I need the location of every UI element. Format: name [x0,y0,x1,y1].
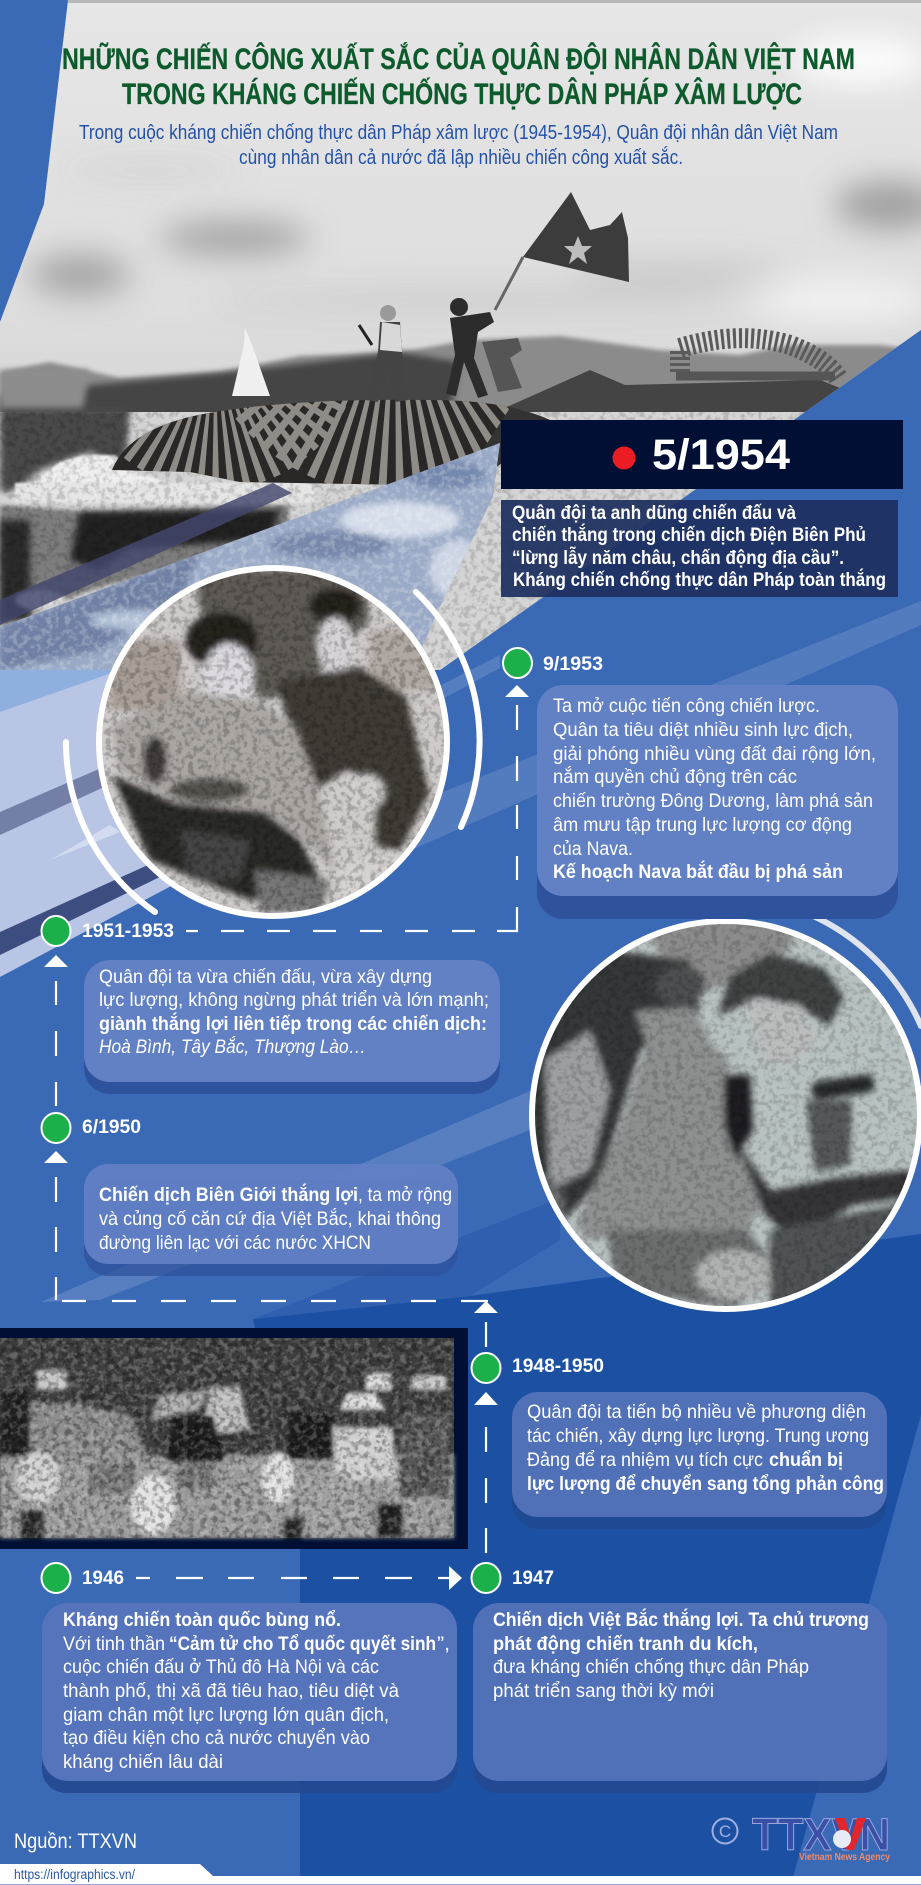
panel: 6/1950 card: và củng cố căn cứ địa Việt Bắc, khai thông [99,1207,441,1230]
white monument [232,328,270,396]
circular photo: leader with hat and binoculars [525,915,921,1320]
panel: 6/1950 card: , ta mở rộng [358,1184,452,1206]
milestone: 1951-1953 [42,916,174,946]
panel: 6/1950 card: Chiến dịch Biên Giới thắng lợi [99,1182,358,1206]
milestone: 6/1950: 6/1950 [82,1117,141,1138]
timeline dashed connectors [56,705,517,1578]
arcs around the circular photo [66,592,480,912]
mountains [0,334,900,420]
panel: 1948-1950 card: Quân đội ta tiến bộ nhiều về phương diện [527,1401,866,1423]
panel: 9/1953 card: giải phóng nhiều vùng đất đai rộng lớn, [553,743,876,765]
panel: 9/1953 card [537,685,898,919]
panel: 1951-1953 card: Hoà Bình, Tây Bắc, Thượng Lào… [99,1035,366,1058]
milestone: 1951-1953: 1951-1953 [82,921,174,942]
ground and rubble [0,404,805,670]
panel: 1946 card: Với tinh thần [63,1633,165,1655]
circular photo: two commanders at a map [95,562,455,922]
text block: 5/1954: Kháng chiến chống thực dân Pháp toàn thắng [513,569,886,591]
milestone: 1948-1950 [472,1353,604,1383]
milestone: 1948-1950: 1948-1950 [512,1356,604,1377]
panel: 1948-1950 card [512,1392,887,1529]
footer strip: https://infographics.vn/ [14,1867,135,1882]
panel: 1946 card: tạo điều kiện cho cả nước chuyển vào [63,1727,370,1749]
panel: 1947 card [473,1603,887,1793]
panel: 1946 card: “Cảm tử cho Tổ quốc quyết sinh [169,1633,436,1655]
logo: TTXVN: C [719,1822,731,1841]
footer strip [0,1864,921,1885]
panel: 1951-1953 card: Quân đội ta vừa chiến đấu, vừa xây dựng [99,966,432,988]
panel: 1946 card: thành phố, thị xã đã tiêu hao, tiêu diệt và [63,1680,399,1702]
panel: 1947 card: đưa kháng chiến chống thực dân Pháp [493,1656,809,1678]
panel: 1948-1950 card: tác chiến, xây dựng lực lượng. Trung ương [527,1425,869,1447]
panel: 1946 card: Kháng chiến toàn quốc bùng nổ. [63,1609,341,1631]
panel: 9/1953 card: nắm quyền chủ động trên các [553,765,797,788]
lattice structure [500,338,845,420]
title [62,42,855,111]
panel: 1951-1953 card [84,960,500,1094]
milestone: 9/1953 [503,648,603,678]
subtitle: cùng nhân dân cả nước đã lập nhiều chiến công xuất sắc. [239,146,683,169]
panel: 1946 card: ”, [437,1633,450,1655]
text block: 5/1954: “lừng lẫy năm châu, chấn động địa cầu”. [512,547,844,569]
panel: 9/1953 card: âm mưu tập trung lực lượng cơ động [553,814,852,836]
framed photo: crowd of soldiers and civilians [0,1328,468,1549]
text block: 5/1954: chiến thắng trong chiến dịch Điện Biên Phủ [512,524,866,546]
text block: 5/1954: Quân đội ta anh dũng chiến đấu và [512,503,796,524]
panel: 9/1953 card: Ta mở cuộc tiến công chiến lược. [553,695,820,717]
panel: 9/1953 card: của Nava. [553,838,633,860]
panel: 1946 card [42,1603,457,1793]
panel: 1946 card: cuộc chiến đấu ở Thủ đô Hà Nội và các [63,1656,379,1678]
panel: 1947 card: phát động chiến tranh du kích, [493,1633,758,1655]
logo: TTXVN: Vietnam News Agency [799,1852,890,1863]
panel: 1951-1953 card: giành thắng lợi liên tiếp trong các chiến dịch: [99,1011,487,1035]
dark diagonal bar on the photo [0,483,292,625]
panel: 6/1950 card [84,1164,458,1276]
text block: 5/1954 [501,500,898,597]
flag and pole [495,192,629,310]
date banner: 5/1954 [501,420,903,489]
bunker dome [112,400,550,485]
logo: TTXVN: TTXVN [752,1809,890,1860]
panel: 9/1953 card: Quân ta tiêu diệt nhiều sinh lực địch, [553,719,853,741]
panel: 1947 card: Chiến dịch Việt Bắc thắng lợi. Ta chủ trương [493,1607,869,1631]
arrowheads on the timeline [44,685,529,1590]
subtitle [79,121,838,169]
panel: 1946 card: giam chân một lực lượng lớn quân địch, [63,1704,389,1726]
milestone: 1946 [42,1563,124,1593]
arc around the second circular photo [784,905,921,1026]
panel: 1947 card: phát triển sang thời kỳ mới [493,1680,714,1702]
milestone: 9/1953: 9/1953 [543,654,603,675]
milestone: 1947: 1947 [512,1568,554,1589]
blue overlay on the photo [0,443,500,670]
clouds [30,36,921,324]
panel: 1946 card: kháng chiến lâu dài [63,1751,223,1773]
soldiers [359,298,522,402]
photo: flag raised over the bunker at Dien Bien Phu [0,0,921,680]
panel: 9/1953 card: chiến trường Đông Dương, làm phá sản [553,790,873,812]
source: Nguồn: TTXVN [14,1830,137,1853]
panel: 1948-1950 card: lực lượng để chuyển sang tổng phản công [527,1473,884,1495]
milestone: 6/1950 [42,1113,141,1143]
panel: 1948-1950 card: Đảng để ra nhiệm vụ tích cực [527,1449,763,1471]
milestone: 1947 [472,1563,554,1593]
panel: 6/1950 card: đường liên lạc với các nước XHCN [99,1232,371,1254]
date banner: 5/1954: 5/1954 [652,431,790,479]
panel: 9/1953 card: Kế hoạch Nava bắt đầu bị phá sản [553,859,843,883]
milestone: 1946: 1946 [82,1568,124,1589]
panel: 1948-1950 card: chuẩn bị [769,1449,843,1471]
panel: 1951-1953 card: lực lượng, không ngừng phát triển và lớn mạnh; [99,989,489,1011]
